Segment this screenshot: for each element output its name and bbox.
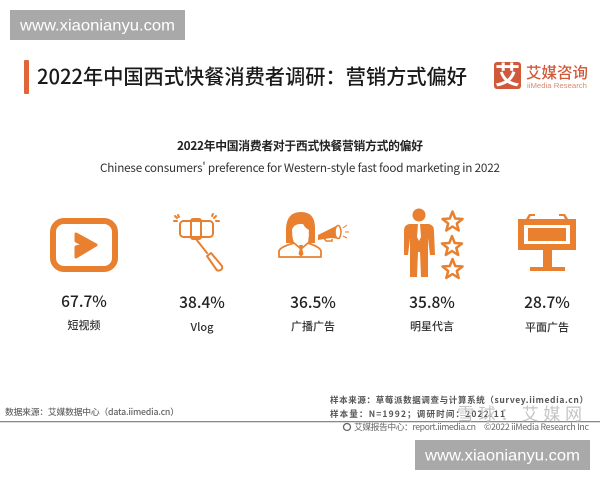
item: short video: 67.7% — [61, 290, 107, 312]
item: short video: 短视频 — [68, 317, 100, 333]
item: vlog: Vlog — [190, 319, 214, 335]
icon: play button — [53, 221, 115, 269]
icon: selfie stick — [174, 214, 222, 271]
icon: billboard — [518, 214, 576, 271]
icon: announcer with megaphone — [279, 212, 349, 257]
watermark: xueqiu overlay: 雪球：艾媒网 — [457, 400, 582, 425]
footer: sample source — [330, 394, 588, 420]
logo: iiMedia Research: iiMedia Research — [527, 81, 587, 90]
item: print ads: 平面广告 — [525, 319, 569, 335]
item: radio ads — [279, 212, 349, 334]
item: radio ads: 36.5% — [290, 291, 336, 313]
logo: iiMedia Research: 艾媒咨询 — [526, 61, 588, 83]
footer: sample source: 样本来源：草莓派数据调查与计算系统（survey.iimedia.cn） — [330, 394, 588, 406]
footer: report centre: ©2022 iiMedia Research Inc — [484, 420, 590, 433]
footer: data source: 数据来源：艾媒数据中心（data.iimedia.cn） — [5, 405, 179, 418]
title: 2022年中国西式快餐消费者调研：营销方式偏好 — [37, 60, 467, 90]
item: celebrity endorsement — [404, 208, 462, 334]
watermark: top left — [10, 10, 185, 40]
item: celebrity endorsement: 35.8% — [409, 291, 455, 313]
footer: report centre — [344, 420, 590, 433]
logo: iiMedia Research: 艾 — [495, 56, 520, 92]
footer: sample source: 样本量：N=1992；调研时间：2022.11 — [330, 408, 505, 420]
watermark: top left: www.xiaonianyu.com — [19, 18, 175, 34]
logo: iiMedia Research — [494, 56, 588, 92]
watermark: bottom right: www.xiaonianyu.com — [424, 448, 580, 464]
item: short video — [53, 221, 115, 333]
watermark: bottom right — [415, 440, 590, 470]
footer: report centre: 艾媒报告中心：report.iimedia.cn — [354, 420, 476, 433]
chart heading: Chinese consumers' preference for Western-style fast food marketing in 2022 — [100, 159, 500, 176]
item: vlog: 38.4% — [179, 291, 225, 313]
item: celebrity endorsement: 明星代言 — [410, 318, 454, 334]
item: print ads: 28.7% — [524, 291, 570, 313]
item: vlog — [174, 214, 225, 335]
footer divider — [0, 421, 600, 422]
chart heading: 2022年中国消费者对于西式快餐营销方式的偏好 — [177, 137, 423, 154]
title accent bar — [24, 60, 29, 94]
item: radio ads: 广播广告 — [291, 318, 335, 334]
icon: suited man with stars — [404, 208, 462, 278]
item: print ads — [518, 214, 576, 335]
chart heading — [100, 137, 500, 176]
